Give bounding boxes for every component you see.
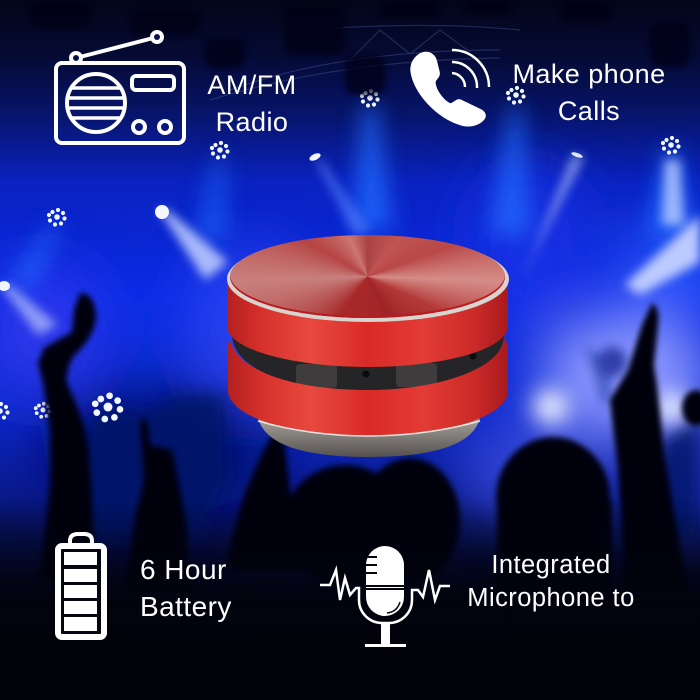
label: AM/FM Radio: Radio [216,107,288,137]
truss rig [210,25,520,100]
label: Make phone Calls [512,59,666,126]
upper red band [227,282,508,367]
label: 6 Hour Battery: 6 Hour [140,554,227,585]
stage performers [70,395,700,540]
speaker top disc [230,235,505,318]
black control strip [232,335,504,392]
label: Integrated Microphone to: Integrated [491,551,611,579]
buttons [296,364,337,388]
product: red speaker [227,235,509,457]
stage lights [0,86,681,422]
label: 6 Hour Battery: Battery [140,591,232,622]
label: Make phone Calls: Make phone [512,59,666,89]
label: Integrated Microphone to: Microphone to [467,584,635,612]
lower red band [228,337,508,436]
label: Make phone Calls: Calls [558,96,620,126]
silver base [258,418,480,457]
label: 6 Hour Battery [140,554,232,622]
label: AM/FM Radio [207,70,297,137]
label: AM/FM Radio: AM/FM [207,70,297,100]
label: Integrated Microphone to [467,551,635,612]
crowd silhouettes [38,293,700,590]
